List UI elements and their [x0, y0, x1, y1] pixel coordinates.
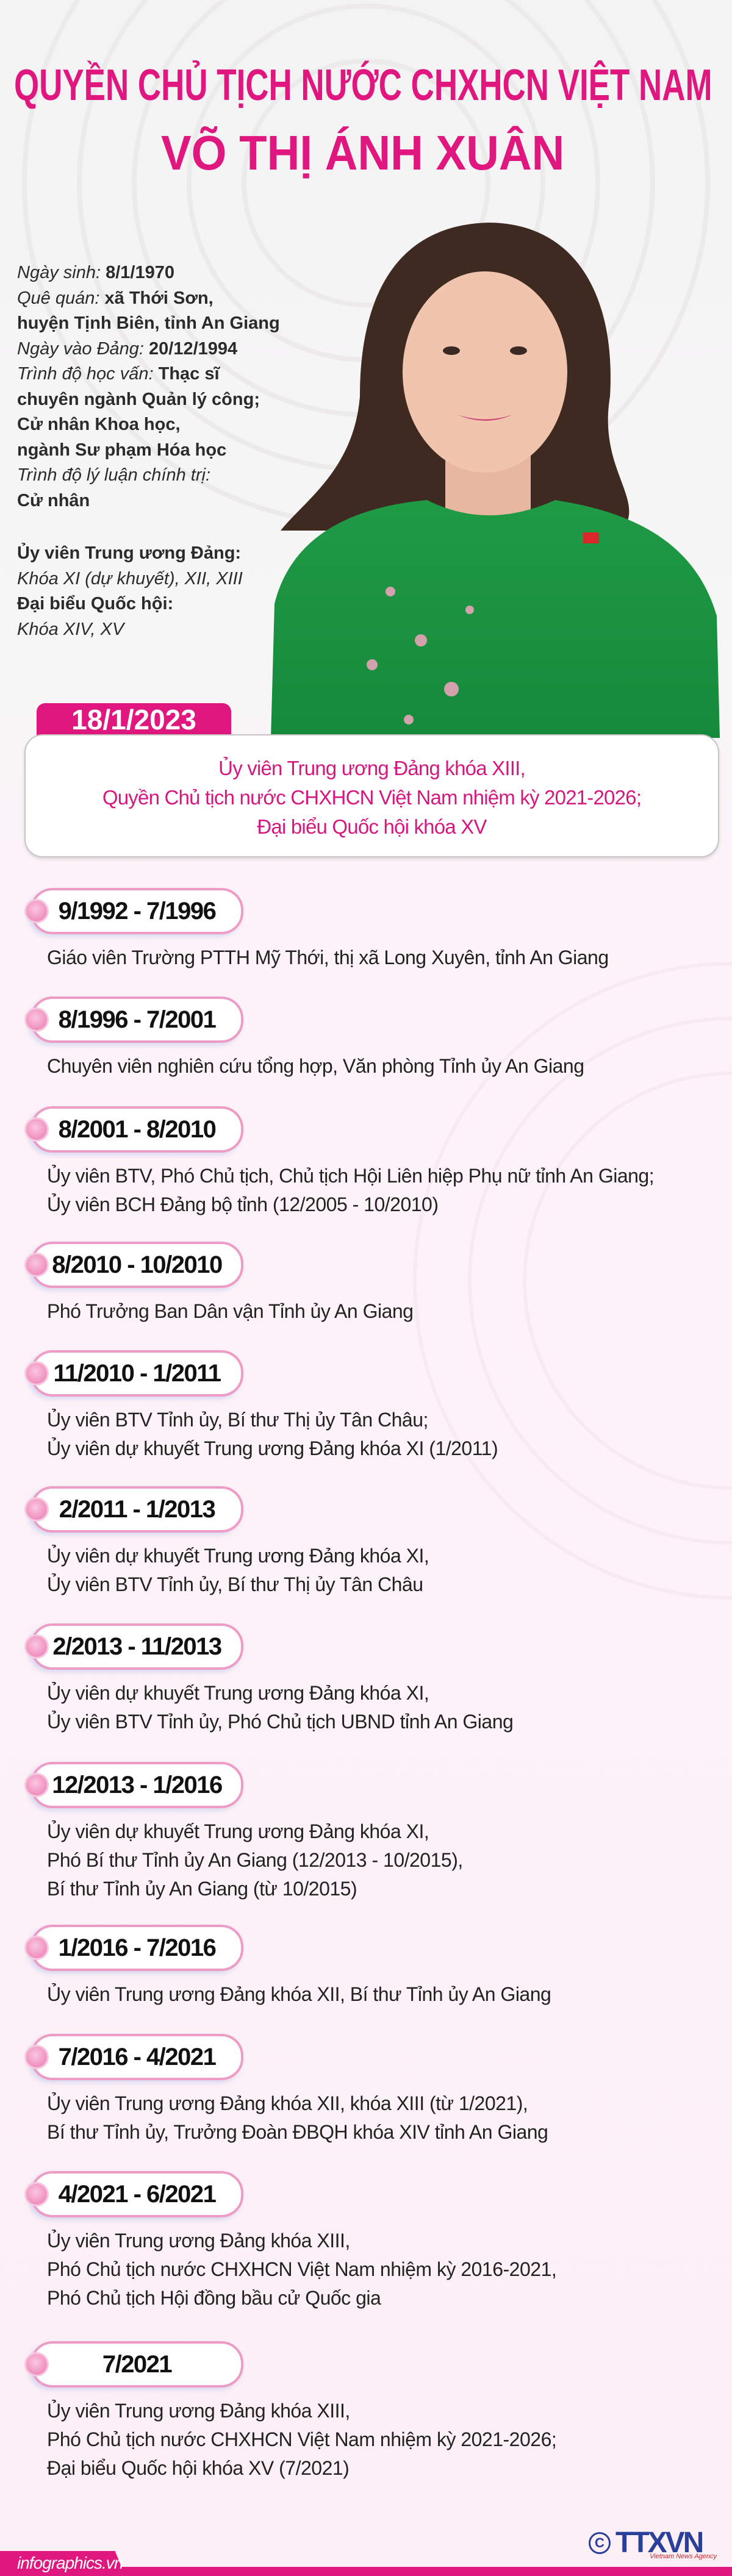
- timeline item 8: [24, 1762, 463, 1900]
- timeline item 6: [24, 1486, 429, 1595]
- info text block: Khóa XIV, XV: [17, 620, 124, 639]
- face: [403, 271, 567, 473]
- timeline item 11: [24, 2171, 556, 2309]
- timeline item 10: Bí thư Tỉnh ủy, Trưởng Đoàn ĐBQH khóa XIV tỉnh An Giang: [47, 2121, 548, 2143]
- title: QUYỀN CHỦ TỊCH NƯỚC CHXHCN VIỆT NAM: [14, 61, 712, 110]
- info text block: ngành Sư phạm Hóa học: [17, 440, 226, 460]
- timeline item 3: [24, 1106, 654, 1215]
- timeline item 1: Giáo viên Trường PTTH Mỹ Thới, thị xã Long Xuyên, tỉnh An Giang: [47, 946, 609, 968]
- timeline item 12: [24, 2341, 556, 2479]
- current position box: [24, 734, 719, 857]
- timeline item 3: Ủy viên BCH Đảng bộ tỉnh (12/2005 - 10/2010): [47, 1193, 438, 1215]
- info text block: Đại biểu Quốc hội:: [17, 594, 173, 614]
- timeline item 2: [24, 996, 584, 1077]
- info text block: Ủy viên Trung ương Đảng:: [17, 543, 241, 563]
- timeline item 6: Ủy viên BTV Tỉnh ủy, Bí thư Thị ủy Tân Châu: [47, 1573, 423, 1595]
- timeline item 5: 11/2010 - 1/2011: [53, 1360, 221, 1387]
- date tab: 18/1/2023: [37, 703, 231, 746]
- timeline item 4: [24, 1242, 413, 1322]
- info text block: Ngày vào Đảng: 20/12/1994: [17, 339, 237, 359]
- info text block: huyện Tịnh Biên, tỉnh An Giang: [17, 313, 280, 333]
- dress: [271, 500, 720, 738]
- current position box: Ủy viên Trung ương Đảng khóa XIII,: [218, 757, 525, 779]
- timeline item 7: Ủy viên dự khuyết Trung ương Đảng khóa XI,: [47, 1682, 429, 1704]
- footer bar: infographics.vn: [17, 2553, 123, 2572]
- info text block: Quê quán: xã Thới Sơn,: [17, 288, 214, 307]
- title: [14, 60, 712, 180]
- timeline item 3: Ủy viên BTV, Phó Chủ tịch, Chủ tịch Hội Liên hiệp Phụ nữ tỉnh An Giang;: [47, 1165, 654, 1187]
- info text block: Cử nhân Khoa học,: [17, 415, 181, 434]
- timeline item 9: Ủy viên Trung ương Đảng khóa XII, Bí thư Tỉnh ủy An Giang: [47, 1983, 551, 2005]
- info text block: Trình độ lý luận chính trị:: [17, 465, 210, 485]
- hair: [281, 223, 629, 531]
- timeline item 2: Chuyên viên nghiên cứu tổng hợp, Văn phòng Tỉnh ủy An Giang: [47, 1055, 584, 1077]
- logo: TTXVN: [589, 2527, 717, 2560]
- title: VÕ THỊ ÁNH XUÂN: [161, 126, 564, 180]
- timeline item 8: 12/2013 - 1/2016: [52, 1772, 222, 1798]
- neck: [445, 445, 531, 543]
- info text block: Ngày sinh: 8/1/1970: [17, 263, 174, 282]
- timeline item 12: Đại biểu Quốc hội khóa XV (7/2021): [47, 2457, 349, 2479]
- timeline item 8: Bí thư Tỉnh ủy An Giang (từ 10/2015): [47, 1878, 357, 1900]
- timeline item 11: Phó Chủ tịch Hội đồng bầu cử Quốc gia: [47, 2287, 381, 2309]
- timeline item 7: 2/2013 - 11/2013: [52, 1633, 221, 1660]
- timeline item 12: 7/2021: [102, 2351, 171, 2378]
- timeline item 1: 9/1992 - 7/1996: [59, 898, 215, 925]
- portrait photo: [271, 223, 720, 738]
- current position box: Quyền Chủ tịch nước CHXHCN Việt Nam nhiệm kỳ 2021-2026;: [102, 786, 641, 809]
- footer bar: [0, 2551, 732, 2576]
- timeline item 12: Phó Chủ tịch nước CHXHCN Việt Nam nhiệm kỳ 2021-2026;: [47, 2428, 556, 2450]
- logo: TTXVN: Vietnam News Agency: [650, 2553, 717, 2560]
- info text block: Trình độ học vấn: Thạc sĩ: [17, 364, 220, 384]
- logo: TTXVN: TTXVN: [615, 2527, 702, 2559]
- timeline item 9: 1/2016 - 7/2016: [59, 1934, 215, 1961]
- timeline item 3: 8/2001 - 8/2010: [59, 1116, 215, 1143]
- timeline item 10: [24, 2034, 548, 2143]
- timeline item 12: Ủy viên Trung ương Đảng khóa XIII,: [47, 2400, 350, 2422]
- timeline item 10: Ủy viên Trung ương Đảng khóa XII, khóa XIII (từ 1/2021),: [47, 2092, 528, 2114]
- timeline item 9: [24, 1925, 551, 2005]
- timeline item 5: Ủy viên BTV Tỉnh ủy, Bí thư Thị ủy Tân Châu;: [47, 1409, 428, 1431]
- timeline item 11: Ủy viên Trung ương Đảng khóa XIII,: [47, 2230, 350, 2252]
- timeline item 11: Phó Chủ tịch nước CHXHCN Việt Nam nhiệm kỳ 2016-2021,: [47, 2258, 556, 2280]
- timeline item 8: Phó Bí thư Tỉnh ủy An Giang (12/2013 - 10/2015),: [47, 1849, 463, 1871]
- info text block: Khóa XI (dự khuyết), XII, XIII: [17, 568, 243, 588]
- timeline item 5: [24, 1350, 498, 1459]
- timeline item 5: Ủy viên dự khuyết Trung ương Đảng khóa XI (1/2011): [47, 1437, 498, 1459]
- timeline item 2: 8/1996 - 7/2001: [59, 1006, 215, 1033]
- timeline item 4: Phó Trưởng Ban Dân vận Tỉnh ủy An Giang: [47, 1300, 413, 1322]
- timeline item 8: Ủy viên dự khuyết Trung ương Đảng khóa XI,: [47, 1820, 429, 1842]
- date tab: 18/1/2023: 18/1/2023: [71, 704, 196, 735]
- logo: TTXVN: C: [595, 2535, 605, 2550]
- timeline item 4: 8/2010 - 10/2010: [52, 1251, 222, 1278]
- timeline item 10: 7/2016 - 4/2021: [59, 2044, 215, 2070]
- timeline item 1: [24, 888, 609, 968]
- timeline item 6: Ủy viên dự khuyết Trung ương Đảng khóa XI,: [47, 1545, 429, 1567]
- info text block: Cử nhân: [17, 490, 90, 510]
- timeline item 7: [24, 1623, 513, 1733]
- info text block: chuyên ngành Quản lý công;: [17, 389, 260, 409]
- timeline item 6: 2/2011 - 1/2013: [59, 1496, 215, 1523]
- current position box: Đại biểu Quốc hội khóa XV: [257, 815, 487, 838]
- timeline item 7: Ủy viên BTV Tỉnh ủy, Phó Chủ tịch UBND tỉnh An Giang: [47, 1711, 513, 1733]
- info text block: [17, 263, 280, 639]
- timeline item 11: 4/2021 - 6/2021: [59, 2181, 215, 2208]
